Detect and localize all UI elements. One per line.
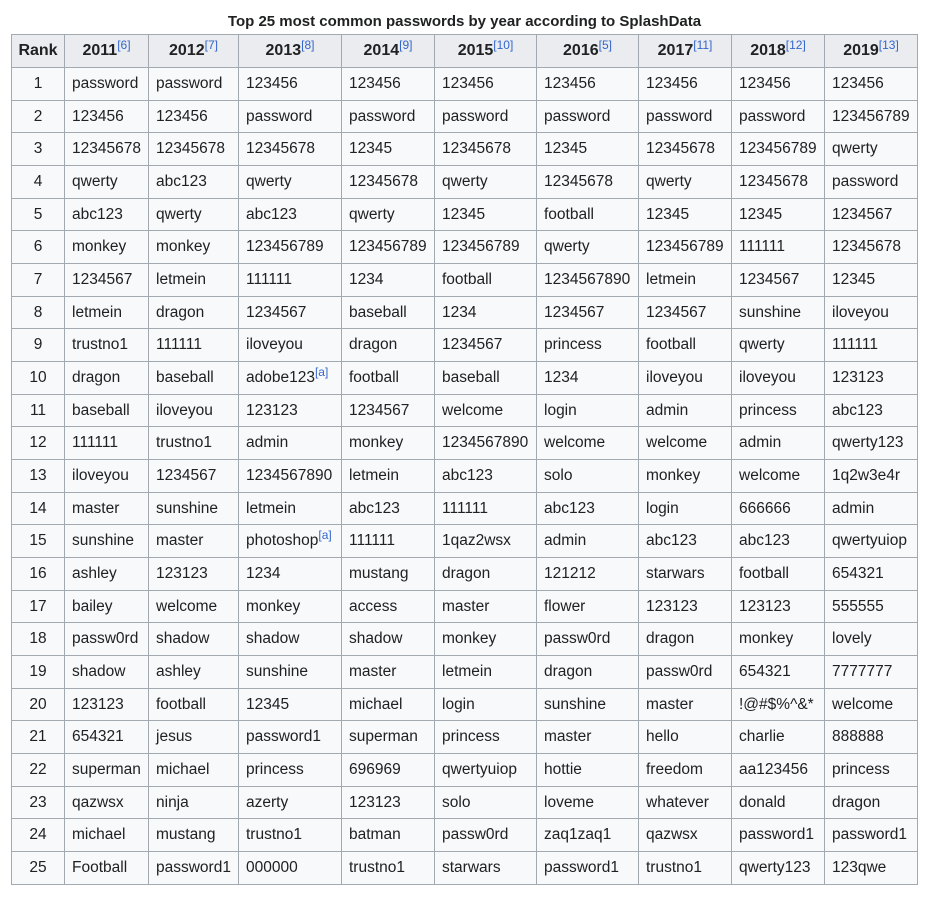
table: passwords by year: flower <box>544 598 585 615</box>
table: passwords by year: 123456 <box>246 75 298 92</box>
table: passwords by year: jesus <box>156 728 192 745</box>
table: passwords by year: 18 <box>29 630 47 647</box>
table: passwords by year: 12345678 <box>739 173 808 190</box>
table: passwords by year: princess <box>442 728 500 745</box>
table: passwords by year: monkey <box>349 434 403 451</box>
table: passwords by year: baseball <box>156 369 214 386</box>
table: passwords by year: 1234567 <box>442 336 502 353</box>
table: passwords by year: 20 <box>29 696 47 713</box>
table: passwords by year: 7 <box>34 271 42 288</box>
table: passwords by year: qwerty <box>72 173 118 190</box>
table: passwords by year: superman <box>72 761 141 778</box>
table: passwords by year: hottie <box>544 761 582 778</box>
table: passwords by year: solo <box>442 794 470 811</box>
table: passwords by year: master <box>72 500 119 517</box>
table: passwords by year: monkey <box>156 238 210 255</box>
table: passwords by year: 123456 <box>349 75 401 92</box>
table: passwords by year: monkey <box>246 598 300 615</box>
table: passwords by year: master <box>349 663 396 680</box>
table: passwords by year: baseball <box>72 402 130 419</box>
table: passwords by year: football <box>156 696 206 713</box>
table: passwords by year: 12345 <box>832 271 875 288</box>
table: passwords by year: 12345678 <box>646 140 715 157</box>
table: passwords by year: 11 <box>30 402 46 419</box>
table: passwords by year: 123456789 <box>246 238 324 255</box>
table: passwords by year: 2019[13] <box>843 38 899 59</box>
table: passwords by year: sunshine <box>72 532 134 549</box>
table: passwords by year: aa123456 <box>739 761 808 778</box>
table: passwords by year: qwerty <box>739 336 785 353</box>
table: passwords by year: solo <box>544 467 572 484</box>
table: passwords by year: letmein <box>246 500 296 517</box>
table: passwords by year: lovely <box>832 630 872 647</box>
table: passwords by year: loveme <box>544 794 594 811</box>
table: passwords by year: football <box>739 565 789 582</box>
table: passwords by year: 123456 <box>72 108 124 124</box>
table: passwords by year: password <box>832 173 898 190</box>
table: passwords by year: qwerty <box>349 206 395 223</box>
table: passwords by year: dragon <box>156 304 204 321</box>
table: passwords by year: 666666 <box>739 500 791 517</box>
table: passwords by year: batman <box>349 826 401 843</box>
table: passwords by year: football <box>349 369 399 386</box>
table: passwords by year: 24 <box>29 826 47 843</box>
table: passwords by year: trustno1 <box>156 434 212 451</box>
table: passwords by year: password1 <box>246 728 321 745</box>
table: passwords by year: 1234567890 <box>442 434 528 451</box>
table: passwords by year: sunshine <box>739 304 801 321</box>
table: passwords by year: 1234 <box>246 565 280 582</box>
table: passwords by year: 111111 <box>156 336 202 353</box>
table: passwords by year: sunshine <box>246 663 308 680</box>
table: passwords by year: ninja <box>156 794 189 811</box>
table: passwords by year: 4 <box>34 173 42 190</box>
table: passwords by year: admin <box>739 434 781 451</box>
table: passwords by year: 1q2w3e4r <box>832 467 900 484</box>
table: passwords by year: 2018[12] <box>750 38 806 59</box>
table: passwords by year: 2015[10] <box>458 38 513 59</box>
table: passwords by year: abc123 <box>349 500 400 517</box>
table: passwords by year: admin <box>832 500 874 517</box>
table: passwords by year: qazwsx <box>72 794 124 811</box>
table: passwords by year: 123qwe <box>832 859 886 876</box>
table: passwords by year: hello <box>646 728 679 745</box>
table: passwords by year: master <box>442 598 489 615</box>
table: passwords by year: 23 <box>29 794 47 811</box>
table: passwords by year: trustno1 <box>72 336 128 353</box>
table: passwords by year: 123456789 <box>646 238 724 255</box>
table: passwords by year: dragon <box>646 630 694 647</box>
table: passwords by year: master <box>544 728 591 745</box>
table: passwords by year: password <box>442 108 508 124</box>
table: passwords by year: welcome <box>544 434 605 451</box>
table: passwords by year: 654321 <box>72 728 124 745</box>
table: passwords by year: qwertyuiop <box>832 532 907 549</box>
table: passwords by year: 5 <box>34 206 42 223</box>
table: passwords by year: letmein <box>72 304 122 321</box>
table: passwords by year: donald <box>739 794 786 811</box>
table: passwords by year: abc123 <box>72 206 123 223</box>
table: passwords by year: password <box>646 108 712 124</box>
table: passwords by year: 555555 <box>832 598 884 615</box>
table: passwords by year: michael <box>156 761 209 778</box>
table: passwords by year: Football <box>72 859 127 876</box>
table: passwords by year: 123456789 <box>739 140 817 157</box>
table: passwords by year: 1234567 <box>646 304 706 321</box>
table: passwords by year: qwerty123 <box>832 434 904 451</box>
table: passwords by year: passw0rd <box>72 630 138 647</box>
table: passwords by year: password1 <box>544 859 619 876</box>
table: passwords by year: ashley <box>156 663 201 680</box>
table: passwords by year: iloveyou <box>832 304 889 321</box>
table: passwords by year: letmein <box>349 467 399 484</box>
table: passwords by year: login <box>646 500 679 517</box>
table: passwords by year: 888888 <box>832 728 884 745</box>
table: passwords by year: shadow <box>349 630 402 647</box>
table: passwords by year: passw0rd <box>442 826 508 843</box>
table: passwords by year: login <box>442 696 475 713</box>
table: passwords by year: princess <box>544 336 602 353</box>
table: passwords by year: qwerty <box>646 173 692 190</box>
table: passwords by year: admin <box>646 402 688 419</box>
table: passwords by year: qwerty <box>544 238 590 255</box>
table: passwords by year: 13 <box>29 467 47 484</box>
table: passwords by year: 10 <box>29 369 47 386</box>
table: passwords by year: qwerty <box>246 173 292 190</box>
table: passwords by year: password <box>544 108 610 124</box>
table: passwords by year: 123456 <box>156 108 208 124</box>
table: passwords by year: 111111 <box>832 336 878 353</box>
table: passwords by year: 1234567 <box>544 304 604 321</box>
table: passwords by year: access <box>349 598 397 615</box>
table: passwords by year: 123123 <box>72 696 124 713</box>
table: passwords by year: 12 <box>29 434 47 451</box>
table: passwords by year: 12345 <box>544 140 587 157</box>
table: passwords by year: 2011[6] <box>82 38 131 59</box>
table: passwords by year: 123123 <box>349 794 401 811</box>
table: passwords by year: 123456 <box>739 75 791 92</box>
table: passwords by year: 2016[5] <box>563 38 612 59</box>
table: passwords by year: letmein <box>442 663 492 680</box>
table: passwords by year: 123456789 <box>832 108 910 124</box>
table: passwords by year: 2013[8] <box>266 38 314 59</box>
table: passwords by year: 111111 <box>349 532 395 549</box>
table: passwords by year: 123123 <box>739 598 791 615</box>
table: passwords by year: login <box>544 402 577 419</box>
table: passwords by year: starwars <box>442 859 501 876</box>
table: passwords by year: abc123 <box>442 467 493 484</box>
table: passwords by year: ashley <box>72 565 117 582</box>
table: passwords by year: azerty <box>246 794 288 811</box>
table: passwords by year: shadow <box>72 663 125 680</box>
table: passwords by year: 111111 <box>246 271 292 288</box>
table: passwords by year: admin <box>544 532 586 549</box>
table: passwords by year: michael <box>349 696 402 713</box>
table: passwords by year: iloveyou <box>646 369 703 386</box>
table: passwords by year: dragon <box>349 336 397 353</box>
table: passwords by year: 696969 <box>349 761 401 778</box>
table: passwords by year: 12345 <box>739 206 782 223</box>
table: passwords by year: iloveyou <box>156 402 213 419</box>
table: passwords by year: 123456 <box>832 75 884 92</box>
table: passwords by year: football <box>442 271 492 288</box>
table: passwords by year: 25 <box>29 859 47 876</box>
table: passwords by year: admin <box>246 434 288 451</box>
table: passwords by year: welcome <box>442 402 503 419</box>
table: passwords by year: 12345678 <box>246 140 315 157</box>
table: passwords by year: freedom <box>646 761 703 778</box>
table: passwords by year: 121212 <box>544 565 596 582</box>
table: passwords by year: 1234567 <box>156 467 216 484</box>
table: passwords by year: shadow <box>156 630 209 647</box>
table: passwords by year: 16 <box>29 565 47 582</box>
table: passwords by year: letmein <box>646 271 696 288</box>
table: passwords by year: 1234567 <box>246 304 306 321</box>
table: passwords by year: 22 <box>29 761 47 778</box>
table: passwords by year: abc123 <box>156 173 207 190</box>
table: passwords by year: starwars <box>646 565 705 582</box>
table: passwords by year: 123123 <box>246 402 298 419</box>
table: passwords by year: 21 <box>29 728 47 745</box>
table: passwords by year: bailey <box>72 598 112 615</box>
table: passwords by year: 2017[11] <box>658 38 712 59</box>
table: passwords by year: 17 <box>29 598 47 615</box>
table: passwords by year: trustno1 <box>349 859 405 876</box>
table: passwords by year: 123123 <box>832 369 884 386</box>
table: passwords by year: iloveyou <box>72 467 129 484</box>
table: passwords by year: 1234567 <box>349 402 409 419</box>
table: passwords by year: sunshine <box>156 500 218 517</box>
table: passwords by year: passw0rd <box>544 630 610 647</box>
table: passwords by year: 12345678 <box>832 238 901 255</box>
table: passwords by year: 123456 <box>646 75 698 92</box>
table: passwords by year: monkey <box>442 630 496 647</box>
table: passwords by year: 123456789 <box>442 238 520 255</box>
table: passwords by year: 15 <box>29 532 47 549</box>
table: passwords by year: baseball <box>442 369 500 386</box>
table: passwords by year: 1qaz2wsx <box>442 532 511 549</box>
table: passwords by year: 12345678 <box>544 173 613 190</box>
table: passwords by year: 1234 <box>442 304 476 321</box>
table: passwords by year: 123123 <box>646 598 698 615</box>
table: passwords by year: welcome <box>739 467 800 484</box>
table: passwords by year: !@#$%^&* <box>739 696 814 713</box>
table: passwords by year: password1 <box>832 826 907 843</box>
table: passwords by year: abc123 <box>246 206 297 223</box>
table: passwords by year: shadow <box>246 630 299 647</box>
table: passwords by year: iloveyou <box>739 369 796 386</box>
table: passwords by year: welcome <box>156 598 217 615</box>
table: passwords by year: 12345 <box>646 206 689 223</box>
table: passwords by year: baseball <box>349 304 407 321</box>
table: passwords by year: 12345 <box>442 206 485 223</box>
table: passwords by year: master <box>646 696 693 713</box>
table: passwords by year: princess <box>246 761 304 778</box>
table: passwords by year: iloveyou <box>246 336 303 353</box>
table: passwords by year: password <box>246 108 312 124</box>
table: passwords by year: 654321 <box>832 565 884 582</box>
table: passwords by year: photoshop[a] <box>246 528 332 549</box>
table: passwords by year: charlie <box>739 728 785 745</box>
table: passwords by year: princess <box>739 402 797 419</box>
table: passwords by year: mustang <box>349 565 408 582</box>
table: passwords by year: 2 <box>34 108 42 124</box>
table: passwords by year: 6 <box>34 238 42 255</box>
table: passwords by year: qwerty <box>156 206 202 223</box>
table: passwords by year: Rank <box>18 42 58 59</box>
table: passwords by year: monkey <box>739 630 793 647</box>
table: passwords by year: 000000 <box>246 859 298 876</box>
table: passwords by year: 1234567890 <box>246 467 332 484</box>
table: passwords by year: qwertyuiop <box>442 761 517 778</box>
table: passwords by year: 12345 <box>246 696 289 713</box>
table: passwords by year: welcome <box>646 434 707 451</box>
table: passwords by year: passw0rd <box>646 663 712 680</box>
table: passwords by year: zaq1zaq1 <box>544 826 611 843</box>
table: passwords by year: 1234567 <box>739 271 799 288</box>
table: passwords by year: monkey <box>72 238 126 255</box>
table: passwords by year: 12345678 <box>442 140 511 157</box>
table: passwords by year: password <box>72 75 138 92</box>
table: passwords by year: superman <box>349 728 418 745</box>
table: passwords by year: 2014[9] <box>364 38 412 59</box>
table: passwords by year: monkey <box>646 467 700 484</box>
table: passwords by year: dragon <box>442 565 490 582</box>
table: passwords by year: 123456 <box>442 75 494 92</box>
table: passwords by year: whatever <box>646 794 709 811</box>
table: passwords by year: abc123 <box>646 532 697 549</box>
table: passwords by year: master <box>156 532 203 549</box>
table: passwords by year: 111111 <box>442 500 488 517</box>
table: passwords by year: 1234 <box>544 369 578 386</box>
table: passwords by year: 1234567 <box>72 271 132 288</box>
table: passwords by year: 19 <box>29 663 47 680</box>
table: passwords by year: qwerty <box>442 173 488 190</box>
table: passwords by year: 1234567 <box>832 206 892 223</box>
table: passwords by year: abc123 <box>832 402 883 419</box>
table: passwords by year: qwerty123 <box>739 859 811 876</box>
table: passwords by year: adobe123[a] <box>246 365 328 386</box>
table: passwords by year: 123123 <box>156 565 208 582</box>
table: passwords by year: qazwsx <box>646 826 698 843</box>
table: passwords by year: dragon <box>544 663 592 680</box>
table: passwords by year: 7777777 <box>832 663 892 680</box>
table: passwords by year: password <box>156 75 222 92</box>
table: passwords by year: 8 <box>34 304 42 321</box>
table: passwords by year: password1 <box>156 859 231 876</box>
table: passwords by year: mustang <box>156 826 215 843</box>
table: passwords by year: 9 <box>34 336 42 353</box>
table: passwords by year: 654321 <box>739 663 791 680</box>
table: passwords by year: dragon <box>72 369 120 386</box>
table: passwords by year: 12345 <box>349 140 392 157</box>
table: passwords by year: trustno1 <box>646 859 702 876</box>
table: passwords by year: 111111 <box>72 434 118 451</box>
table: passwords by year: 2012[7] <box>169 38 218 59</box>
table: passwords by year: sunshine <box>544 696 606 713</box>
table: passwords by year: 123456 <box>544 75 596 92</box>
table: passwords by year: 1234 <box>349 271 383 288</box>
table: passwords by year: abc123 <box>544 500 595 517</box>
table: passwords by year: dragon <box>832 794 880 811</box>
table: passwords by year: football <box>544 206 594 223</box>
table: passwords by year: 14 <box>29 500 47 517</box>
table: passwords by year: abc123 <box>739 532 790 549</box>
table: passwords by year: 3 <box>34 140 42 157</box>
table: passwords by year: 12345678 <box>156 140 225 157</box>
table: passwords by year: 111111 <box>739 238 785 255</box>
table: passwords by year: 12345678 <box>72 140 141 157</box>
table: passwords by year: password <box>349 108 415 124</box>
table: passwords by year: qwerty <box>832 140 878 157</box>
table: passwords by year: michael <box>72 826 125 843</box>
table: passwords by year: 1234567890 <box>544 271 630 288</box>
table: passwords by year: welcome <box>832 696 893 713</box>
table: passwords by year: princess <box>832 761 890 778</box>
table: passwords by year: 123456789 <box>349 238 427 255</box>
table: passwords by year: letmein <box>156 271 206 288</box>
table: passwords by year: 12345678 <box>349 173 418 190</box>
table: passwords by year: password <box>739 108 805 124</box>
table: passwords by year: football <box>646 336 696 353</box>
table: passwords by year: trustno1 <box>246 826 302 843</box>
table: passwords by year: 1 <box>34 75 42 92</box>
table: passwords by year: password1 <box>739 826 814 843</box>
title: Top 25 most common passwords by year according to SplashData <box>228 13 701 30</box>
